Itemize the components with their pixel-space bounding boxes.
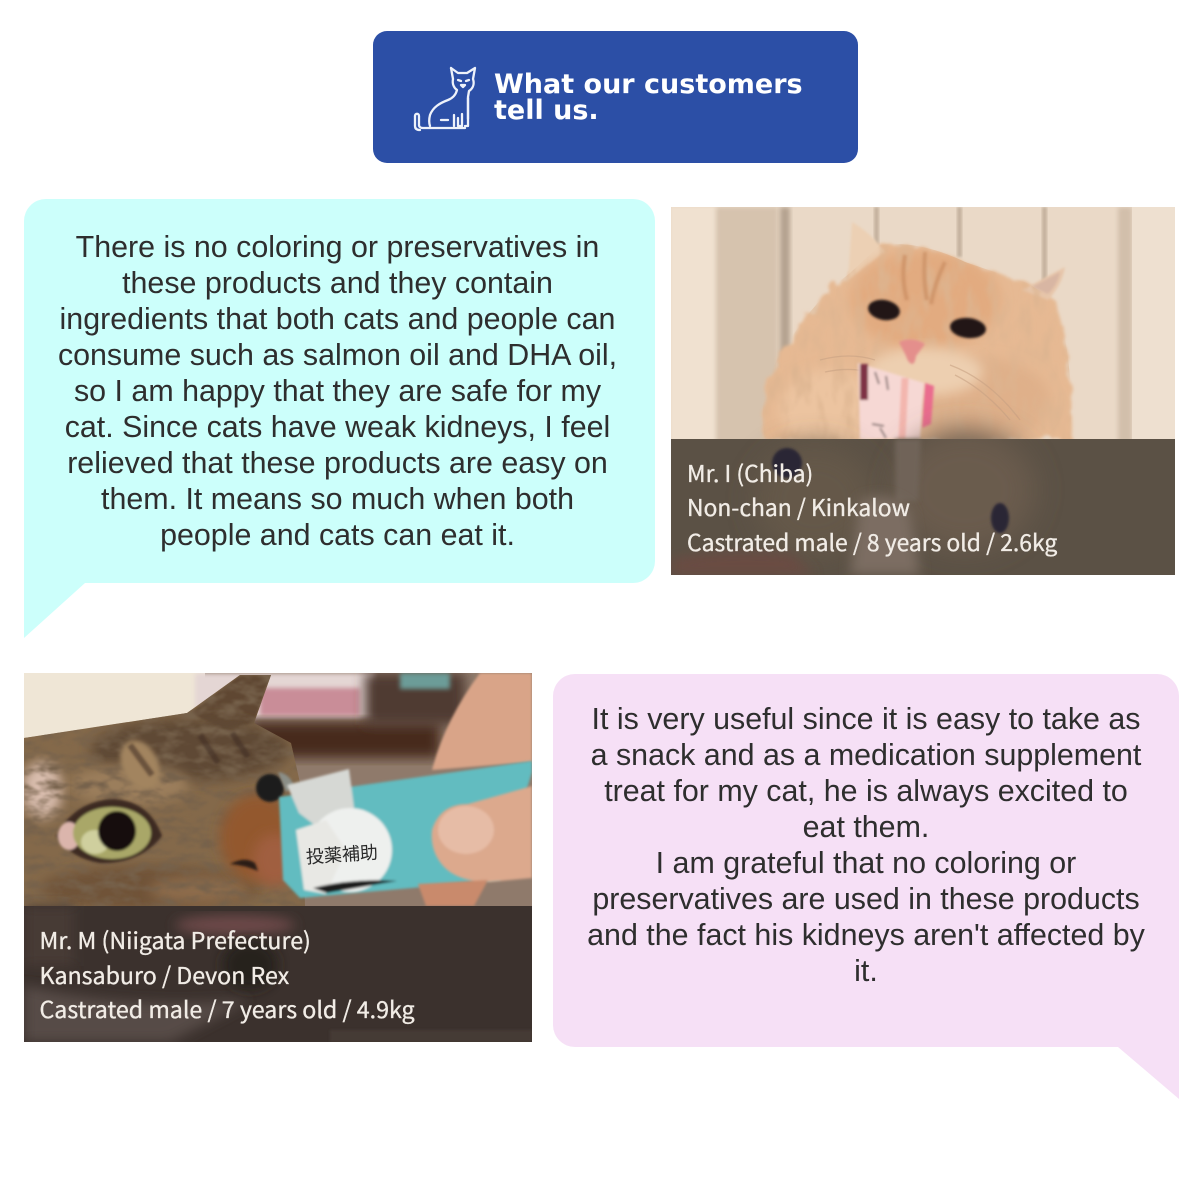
caption text: Castrated male / 7 years old / 4.9kg — [40, 991, 415, 1025]
testimonial text — [58, 230, 617, 552]
cat head — [22, 673, 314, 913]
header title: What our customers — [494, 69, 803, 100]
teal treat packet — [279, 761, 532, 898]
caption text: Castrated male / 8 years old / 2.6kg — [687, 524, 1057, 558]
testimonial text: preservatives are used in these products — [592, 882, 1140, 916]
testimonial text: people and cats can eat it. — [160, 518, 515, 552]
header title: tell us. — [494, 95, 599, 126]
testimonial text: them. It means so much when both — [101, 482, 574, 516]
testimonial text: I am grateful that no coloring or — [656, 846, 1076, 880]
background room — [24, 673, 532, 1042]
testimonial text: and the fact his kidneys aren't affected by — [587, 918, 1145, 952]
fingers — [418, 786, 532, 906]
hand upper — [432, 673, 532, 770]
photo: long-haired cat with caption — [671, 207, 1175, 575]
cat body and head — [760, 222, 1080, 450]
caption text: Kansaburo / Devon Rex — [40, 957, 290, 991]
testimonial text: consume such as salmon oil and DHA oil, — [58, 338, 617, 372]
panel: testimonial bubble cyan — [24, 199, 655, 638]
testimonial text: eat them. — [803, 810, 929, 844]
testimonial text: treat for my cat, he is always excited to — [604, 774, 1128, 808]
testimonial text: so I am happy that they are safe for my — [74, 374, 601, 408]
nose — [899, 339, 925, 364]
testimonial text — [587, 702, 1145, 988]
caption text — [40, 922, 415, 1025]
panel: testimonial bubble pink — [553, 674, 1179, 1099]
testimonial text: a snack and as a medication supplement — [591, 738, 1141, 772]
photo: tabby cat with caption — [24, 673, 532, 1042]
icon: cat outline — [414, 66, 476, 132]
caption overlay band — [24, 906, 532, 1042]
caption text — [687, 455, 1057, 558]
testimonial text: cat. Since cats have weak kidneys, I feel — [65, 410, 610, 444]
treat packet and tongue — [858, 363, 934, 439]
testimonial text: relieved that these products are easy on — [67, 446, 608, 480]
testimonial text: There is no coloring or preservatives in — [76, 230, 599, 264]
packet label: 投薬補助 — [305, 838, 379, 869]
speech bubble shape — [553, 674, 1179, 1099]
testimonial text: these products and they contain — [122, 266, 553, 300]
testimonial text: ingredients that both cats and people can — [60, 302, 615, 336]
caption overlay band — [671, 430, 1175, 575]
caption text: Non-chan / Kinkalow — [687, 489, 910, 523]
eyes — [867, 297, 987, 340]
caption text: Mr. I (Chiba) — [687, 455, 813, 489]
header banner — [373, 31, 858, 163]
testimonial text: it. — [854, 954, 878, 988]
wall background — [671, 207, 1175, 575]
speech bubble shape — [24, 199, 655, 638]
eye — [56, 799, 162, 863]
header title — [494, 69, 803, 126]
testimonial text: It is very useful since it is easy to take as — [592, 702, 1140, 736]
caption text: Mr. M (Niigata Prefecture) — [40, 922, 311, 956]
